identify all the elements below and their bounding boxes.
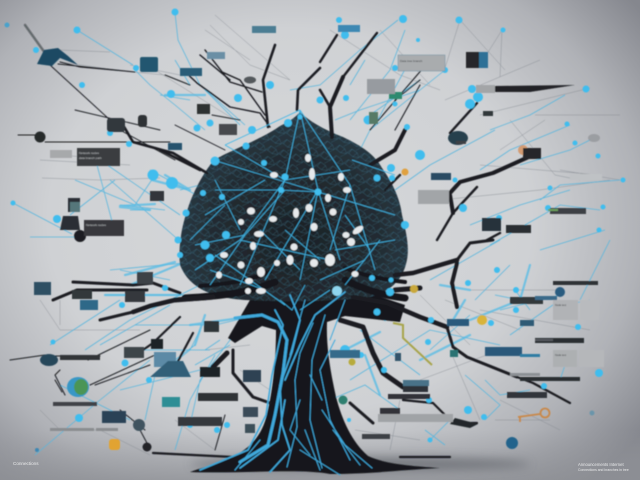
icon: yellow node — [410, 285, 418, 293]
panel: lower-left box 5 — [137, 272, 153, 284]
icon: globe left — [67, 377, 89, 397]
panel: lower box 9 — [154, 352, 176, 367]
panel: light text mid — [418, 190, 449, 204]
panel: light caption left — [50, 150, 72, 158]
panel: right dark bars — [485, 281, 598, 398]
panel: lower box 7 — [124, 347, 144, 358]
panel: lower-left box 3 — [80, 300, 98, 310]
white pebbles — [216, 154, 365, 294]
panel: green tag — [252, 26, 276, 33]
canopy — [179, 112, 408, 301]
icon: yellow node right — [477, 315, 487, 325]
panel: lower-left boxes — [34, 282, 51, 295]
icon: faint grey smudge — [588, 134, 600, 142]
icon: black node — [74, 230, 86, 242]
footer caption right: Announcements Internet — [578, 462, 624, 467]
panel: small cards — [243, 370, 261, 433]
panel: blue label — [431, 173, 451, 180]
footer caption right: Connections and branches in tree — [578, 468, 629, 472]
trunk — [190, 285, 440, 474]
canopy base limbs — [185, 268, 405, 298]
panel: dark pair — [482, 218, 531, 233]
icon: orange key — [518, 408, 550, 422]
panel: black tag — [200, 367, 220, 377]
icon: yellow small — [348, 358, 356, 366]
knife-shaped panel — [495, 85, 575, 92]
panel: caption lines left — [50, 428, 118, 431]
footer caption right — [578, 462, 629, 472]
panel: small tag — [483, 111, 493, 116]
ground shadow — [190, 457, 530, 471]
icon: black bulb — [142, 442, 152, 452]
panel: long bar lower left — [53, 402, 97, 406]
panel: right text blocks: Node text — [555, 353, 566, 357]
footer caption left: Connections — [13, 461, 39, 466]
panel: small grey — [219, 124, 237, 135]
panel: light caption right — [570, 174, 602, 180]
icon: blue cluster top-left — [37, 48, 78, 66]
panel: dark text box left — [77, 148, 120, 166]
panel: left card — [102, 411, 126, 423]
panel: light text box top right — [398, 55, 445, 71]
panel: lower box 6 — [204, 321, 219, 332]
icon: green node — [338, 396, 348, 404]
panel: blue label top — [338, 25, 360, 32]
panel: wide card mid — [198, 393, 238, 401]
panel: small black — [150, 191, 164, 201]
canopy net — [190, 110, 395, 310]
panel: dark text box lower: Network nodes — [86, 223, 107, 227]
small icons — [34, 48, 600, 452]
icon: green card — [389, 92, 402, 99]
icon: globe land — [74, 379, 88, 395]
icon: orange node — [518, 145, 528, 155]
icon: orange tag — [109, 439, 120, 450]
panel: small dark — [197, 104, 210, 114]
panel: blue tag small — [207, 52, 225, 59]
panel: blue tag — [168, 143, 182, 150]
panel: mid lower bars — [330, 319, 469, 439]
panel: lower box 10 — [150, 361, 191, 377]
icon: gauge — [133, 419, 145, 431]
icon: dark node left — [34, 132, 46, 142]
panel: dark and blue card — [466, 52, 488, 68]
icon: dark ring — [448, 131, 468, 145]
panel: lower-left box 4 — [125, 291, 145, 302]
icon: yellow chain — [393, 323, 432, 365]
panel: dark text box left: data branch path — [79, 156, 102, 160]
icon: blue node dark — [555, 287, 565, 297]
panel: dark text box lower — [84, 220, 124, 236]
panel: green and dark tag — [548, 208, 586, 214]
panel: dark node box — [523, 148, 541, 159]
panel: right text blocks: Node text — [555, 303, 566, 307]
panel: light text box top right: Data tree branch — [400, 59, 423, 63]
icon: orange tag small — [402, 168, 408, 176]
panel: long bar low — [178, 417, 222, 426]
canopy fine net — [179, 112, 408, 301]
icon: dark node — [107, 118, 125, 132]
icon: dark node small — [138, 115, 147, 127]
icon: blue cluster bottom — [506, 437, 518, 449]
panel: grey text box — [367, 79, 395, 94]
icon: monitor — [60, 198, 80, 230]
icon: dark wedge — [450, 418, 478, 428]
trunk veins — [200, 292, 372, 475]
panel: blue tag upper — [180, 68, 202, 76]
panel: dark text box left: Network nodes — [79, 151, 100, 155]
panel: lower box 8 — [151, 339, 163, 349]
panel: light tag — [476, 85, 495, 93]
icon: target — [590, 410, 594, 416]
icon: green card small — [369, 112, 378, 124]
panel: lower-left box 2 — [72, 290, 92, 299]
panel: long bar left — [40, 354, 100, 366]
icon: grey device — [244, 76, 256, 84]
icon: teal card — [162, 397, 180, 407]
panel: dark label — [456, 141, 466, 144]
panel: right text blocks — [553, 300, 604, 367]
dark branches — [10, 25, 570, 457]
info panels — [34, 25, 604, 439]
icon: blue cluster — [140, 57, 158, 72]
icon: monitor screen — [70, 202, 80, 212]
